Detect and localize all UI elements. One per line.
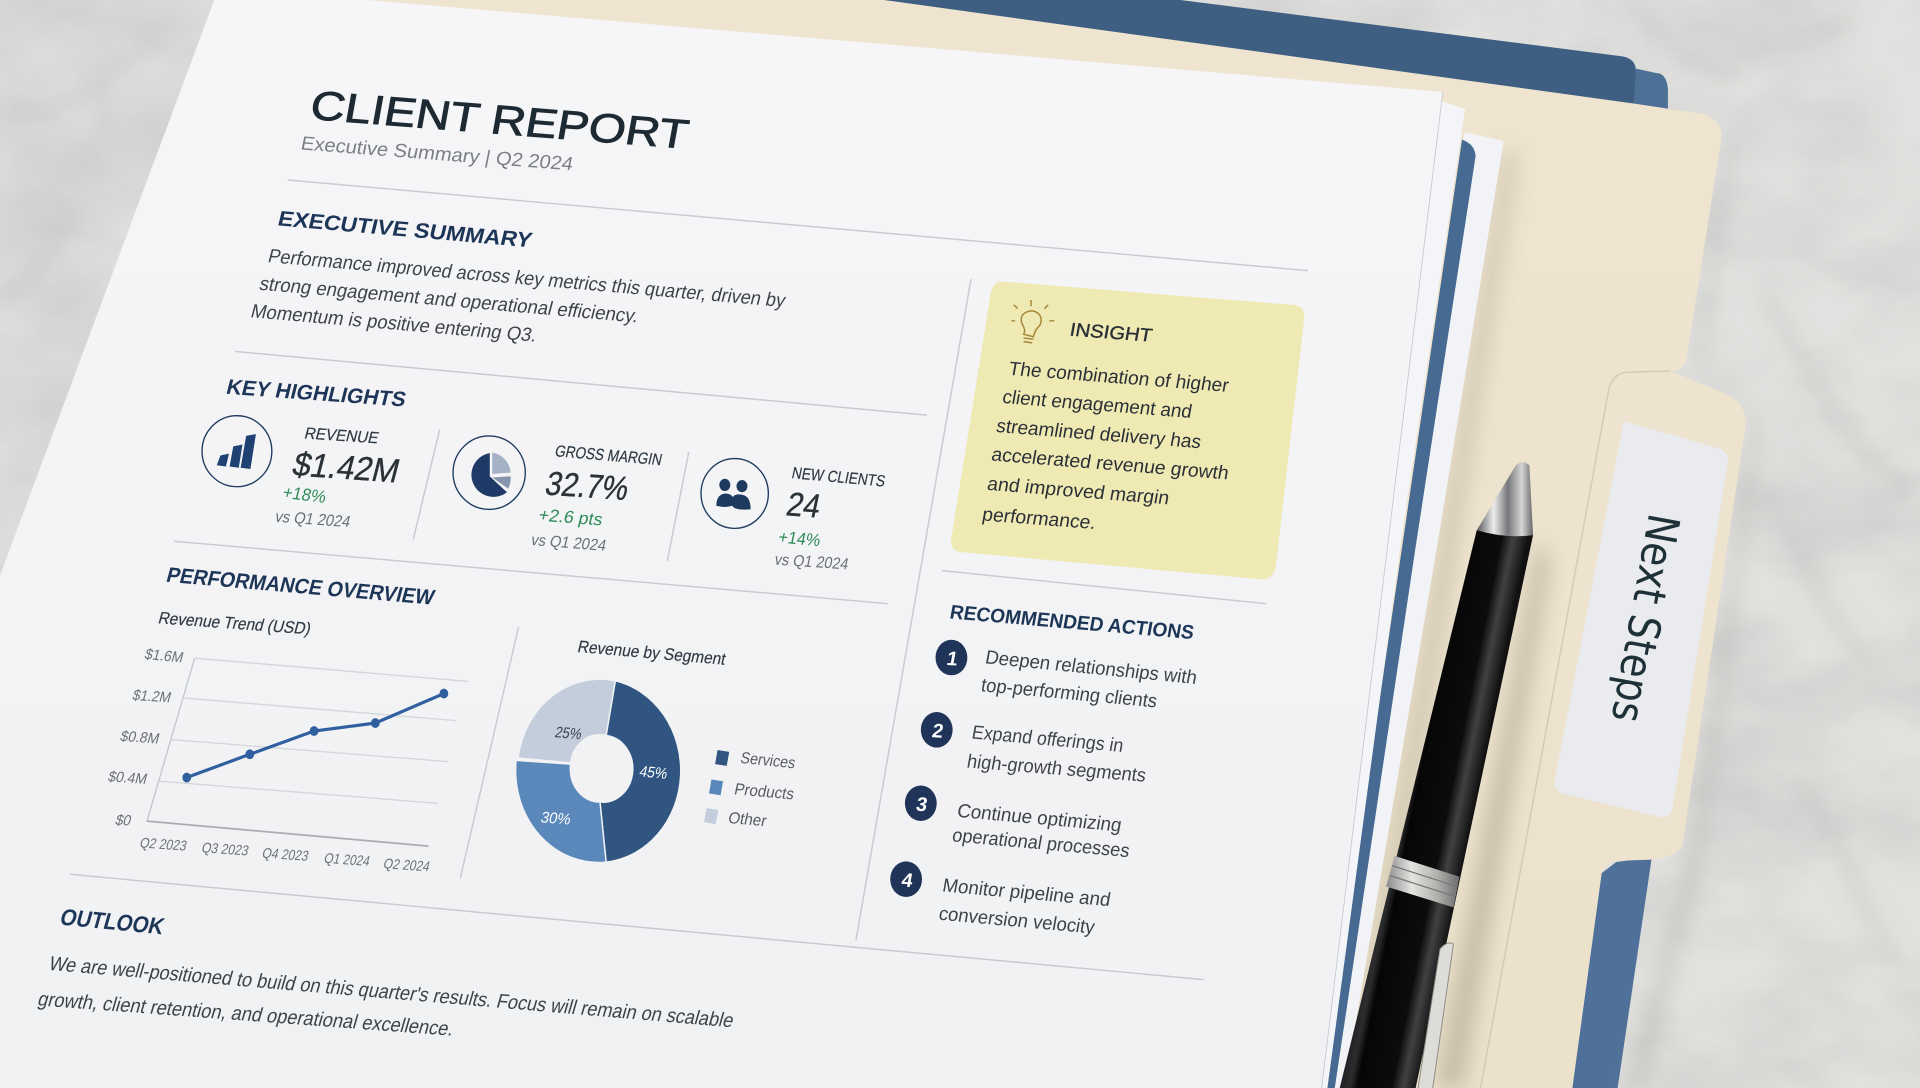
pen clip bbox=[1418, 943, 1453, 1088]
body text: streamlined delivery has bbox=[995, 416, 1203, 453]
x axis labels bbox=[138, 836, 432, 875]
legend bbox=[704, 749, 797, 830]
third paper bbox=[1329, 132, 1504, 1088]
paper edge shadow bbox=[1321, 92, 1442, 1088]
action 2: high-growth segments bbox=[965, 752, 1148, 787]
x axis labels: Q4 2023 bbox=[260, 846, 310, 865]
body text: Momentum is positive entering Q3. bbox=[249, 301, 539, 347]
label: REVENUE bbox=[303, 425, 381, 447]
second paper bbox=[1310, 98, 1465, 1088]
delta: +18% bbox=[281, 482, 329, 507]
title: CLIENT REPORT bbox=[307, 82, 692, 157]
action 1 bbox=[936, 640, 1199, 712]
heading: EXECUTIVE SUMMARY bbox=[276, 208, 534, 252]
pen barrel bbox=[1340, 530, 1533, 1088]
tab label bbox=[1555, 421, 1728, 817]
comparison: vs Q1 2024 bbox=[529, 531, 608, 555]
comparison: vs Q1 2024 bbox=[273, 508, 353, 531]
body text bbox=[249, 246, 788, 347]
value: $1.42M bbox=[289, 447, 404, 490]
line chart: revenue trend bbox=[106, 609, 468, 875]
body text: Performance improved across key metrics this quarter, driven by bbox=[266, 246, 788, 312]
comparison: vs Q1 2024 bbox=[773, 551, 850, 573]
action 2 bbox=[921, 712, 1148, 787]
action 1: top-performing clients bbox=[979, 675, 1159, 712]
icon: bar chart bbox=[202, 416, 272, 487]
action 2: 2 bbox=[930, 720, 945, 743]
manila folder bbox=[245, 0, 1746, 1088]
kpi: revenue bbox=[202, 416, 404, 531]
y axis labels: $1.2M bbox=[131, 687, 173, 706]
body text bbox=[981, 359, 1231, 534]
x axis labels: Q1 2024 bbox=[322, 851, 372, 870]
donut chart: revenue by segment: 30% bbox=[539, 809, 573, 829]
action 1: Deepen relationships with bbox=[984, 647, 1199, 689]
trend line bbox=[182, 689, 448, 782]
delta: +14% bbox=[777, 527, 823, 550]
pen tip bbox=[1477, 462, 1533, 536]
value: 32.7% bbox=[542, 466, 633, 508]
pen shadow bbox=[1435, 539, 1550, 1088]
action 4: Monitor pipeline and bbox=[941, 876, 1112, 911]
x axis labels: Q2 2024 bbox=[382, 856, 432, 875]
body text: strong engagement and operational efficiency. bbox=[257, 274, 641, 327]
heading: PERFORMANCE OVERVIEW bbox=[164, 564, 437, 609]
heading: OUTLOOK bbox=[57, 904, 168, 939]
action 4 bbox=[890, 861, 1112, 939]
label: GROSS MARGIN bbox=[553, 442, 664, 469]
icon: pie chart bbox=[453, 436, 525, 509]
delta: +2.6 pts bbox=[537, 505, 605, 529]
action 3: Continue optimizing bbox=[955, 801, 1123, 836]
donut slices bbox=[516, 679, 681, 862]
heading: KEY HIGHLIGHTS bbox=[224, 376, 409, 411]
kpi: new clients bbox=[701, 459, 887, 573]
legend: Products bbox=[733, 780, 796, 803]
shadow of papers on folder bbox=[1347, 147, 1518, 1088]
body text: The combination of higher bbox=[1007, 359, 1231, 397]
x axis labels: Q3 2023 bbox=[200, 840, 250, 859]
y axis labels: $1.6M bbox=[143, 646, 185, 666]
report page bbox=[0, 0, 1442, 1088]
body text: growth, client retention, and operational excellence. bbox=[35, 989, 457, 1041]
body text: and improved margin bbox=[985, 474, 1171, 509]
slice values: 45% bbox=[638, 764, 669, 783]
chart title: Revenue Trend (USD) bbox=[156, 609, 313, 638]
section: key highlights bbox=[202, 376, 887, 573]
kpi: gross margin bbox=[453, 436, 664, 555]
inner blue folder bbox=[1322, 140, 1476, 1088]
action 3: 3 bbox=[914, 794, 929, 816]
legend: Services bbox=[739, 749, 797, 772]
page sheet bbox=[0, 0, 1442, 1088]
subtitle: Executive Summary | Q2 2024 bbox=[299, 134, 575, 175]
folder shadow bbox=[1626, 137, 1761, 1088]
callout: insight bbox=[951, 282, 1304, 579]
icon: people bbox=[701, 459, 768, 528]
value: 24 bbox=[783, 486, 824, 526]
action 3: operational processes bbox=[951, 825, 1131, 862]
donut chart: revenue by segment bbox=[516, 637, 797, 862]
donut chart: revenue by segment: 25% bbox=[553, 724, 584, 743]
y axis labels: $0.8M bbox=[118, 728, 162, 747]
section: recommended actions bbox=[890, 602, 1199, 939]
chart title: Revenue by Segment bbox=[576, 637, 728, 669]
legend: Other bbox=[726, 809, 769, 830]
section: performance overview bbox=[106, 564, 797, 878]
y axis labels: $0.4M bbox=[106, 768, 149, 788]
body text: We are well-positioned to build on this quarter's results. Focus will remain on scalable bbox=[46, 953, 736, 1032]
action 3 bbox=[905, 786, 1131, 862]
body text: accelerated revenue growth bbox=[990, 445, 1230, 484]
body text: performance. bbox=[981, 505, 1098, 534]
label: NEW CLIENTS bbox=[790, 464, 887, 491]
section: outlook bbox=[35, 904, 736, 1041]
action 4: 4 bbox=[900, 870, 915, 892]
body text: client engagement and bbox=[1001, 387, 1194, 423]
action 4: conversion velocity bbox=[937, 904, 1097, 939]
section: executive summary bbox=[249, 208, 788, 347]
y axis labels bbox=[106, 646, 185, 829]
action 2: Expand offerings in bbox=[970, 723, 1125, 757]
y axis labels: $0 bbox=[113, 812, 133, 829]
icon: light bulb bbox=[1011, 300, 1054, 343]
blue back folder bbox=[882, 0, 1668, 1088]
x axis labels: Q2 2023 bbox=[138, 836, 189, 855]
heading: RECOMMENDED ACTIONS bbox=[948, 602, 1196, 644]
heading: INSIGHT bbox=[1068, 319, 1154, 346]
pen bbox=[1340, 462, 1550, 1088]
tab text: Next Steps: Next Steps bbox=[1601, 510, 1689, 726]
action 1: 1 bbox=[945, 648, 960, 671]
pen ring bbox=[1386, 856, 1460, 907]
